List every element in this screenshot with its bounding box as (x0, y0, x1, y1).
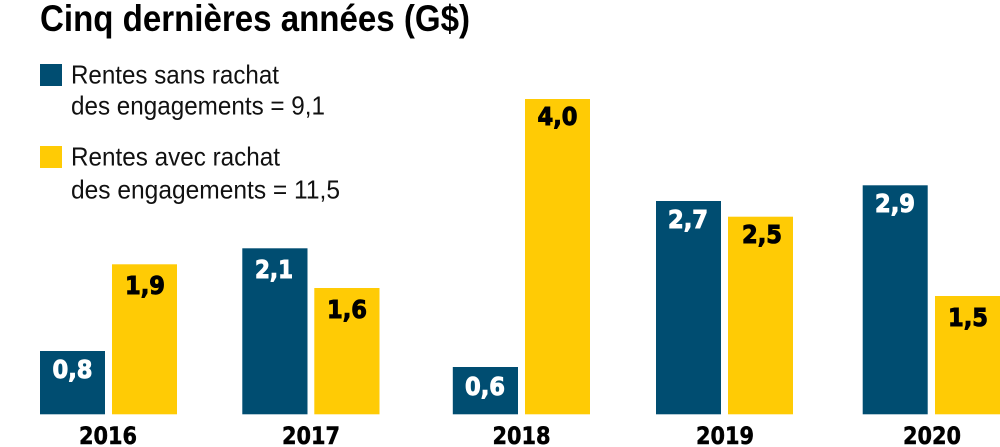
bar group: 2016: 0,8 (52, 355, 92, 384)
legend: rentes avec rachat: Rentes avec rachat (71, 142, 281, 172)
legend: rentes avec rachat: des engagements = 11,5 (71, 174, 340, 204)
bar group: 2016 (40, 264, 177, 447)
bar group: 2019 (656, 201, 793, 447)
legend: rentes sans rachat (40, 60, 325, 120)
legend: rentes sans rachat: des engagements = 9,1 (71, 90, 325, 120)
bar group: 2018 (453, 99, 590, 447)
legend: rentes sans rachat: Rentes sans rachat (71, 60, 280, 90)
bar group: 2017: 2,1 (255, 255, 293, 284)
bar group: 2017: 1,6 (327, 295, 367, 324)
bar group: 2017 (242, 248, 380, 447)
legend: rentes avec rachat (40, 142, 340, 204)
bar group: 2018: 0,6 (465, 372, 505, 401)
bar group: 2018: 4,0 (538, 102, 578, 131)
bar group: 2019: 2,5 (742, 220, 782, 249)
bar group: 2016: 1,9 (125, 271, 165, 300)
bar group: 2020 (863, 185, 1000, 447)
bar group: 2020: 1,5 (948, 303, 988, 332)
bar group: 2019: 2,7 (668, 205, 708, 234)
bar group: 2020: 2,9 (875, 189, 915, 218)
